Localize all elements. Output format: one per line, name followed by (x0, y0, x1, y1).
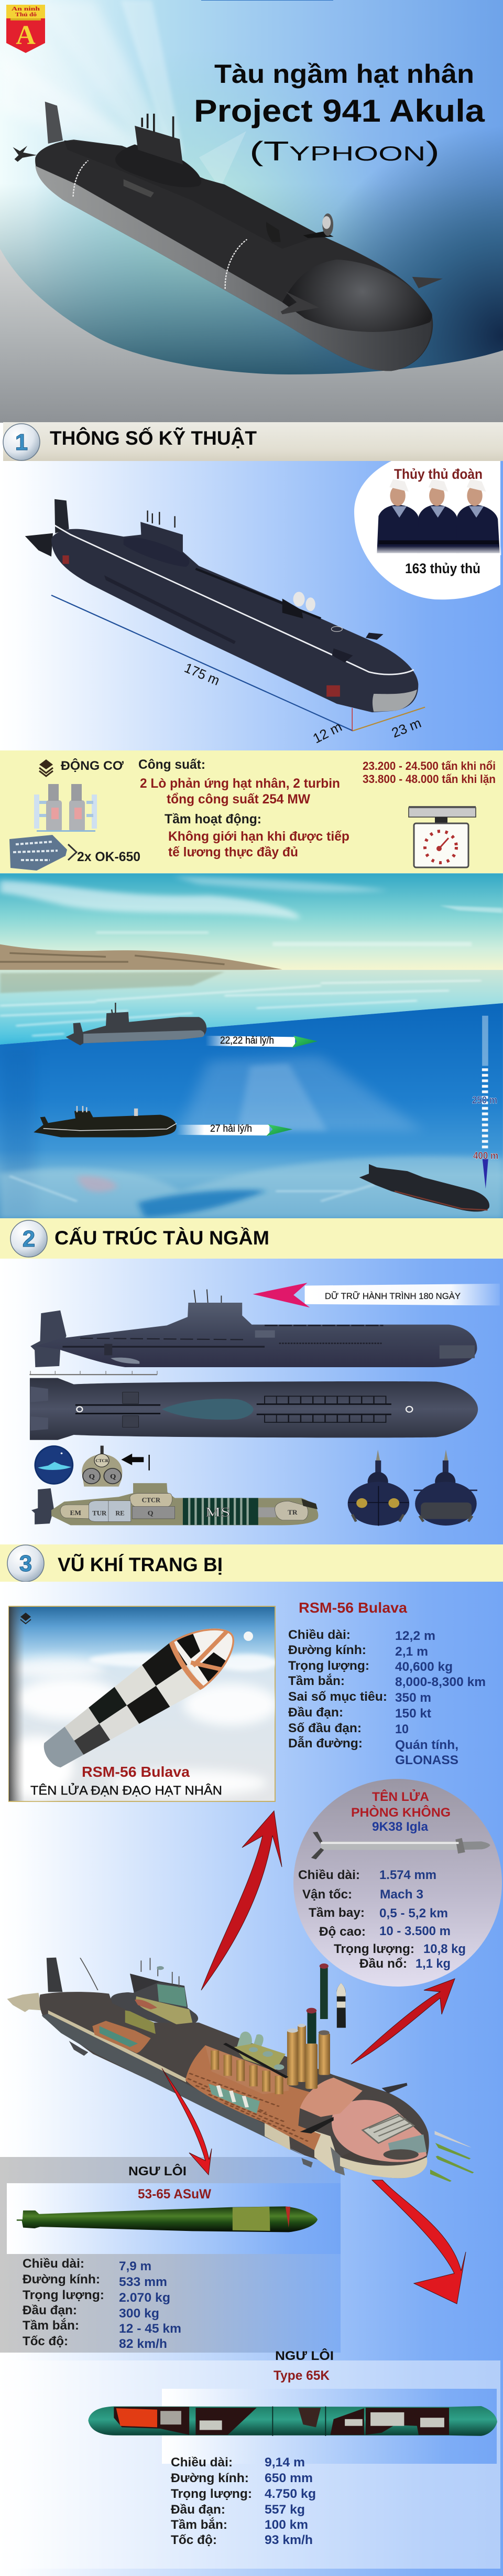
panel: torpedo 53-65: Trọng lượng: (23, 2288, 104, 2302)
panel: engine and weight: 33.800 - 48.000 tấn khi lặn (363, 772, 496, 786)
panel: engine and weight: tổng công suất 254 MW (167, 792, 310, 807)
panel: 9K38 Igla: TÊN LỬA (372, 1789, 429, 1804)
icon: sailors (375, 479, 501, 555)
panel: crew: Thủy thủ đoàn (394, 466, 483, 482)
arrow: to torpedo Type 65K (372, 2180, 466, 2304)
missile: Igla (311, 1832, 490, 1859)
panel: 9K38 Igla: 1.574 mm (379, 1868, 436, 1882)
panel: Bulava specs: 12,2 m (395, 1629, 435, 1643)
panel: Bulava image: RSM-56 Bulava (82, 1764, 190, 1780)
panel: torpedo 53-65: 12 - 45 km (119, 2322, 181, 2336)
submarine: dived (34, 1106, 177, 1137)
panel: 9K38 Igla: 0,5 - 5,2 km (379, 1906, 448, 1920)
arrow: 27 knots (177, 1123, 292, 1136)
panel: torpedo 53-65: 533 mm (119, 2275, 167, 2289)
panel: Bulava specs (288, 1600, 486, 1767)
torpedo image: Type 65K (88, 2406, 497, 2436)
panel: Bulava image: TÊN LỬA ĐẠN ĐẠO HẠT NHÂN (30, 1783, 222, 1798)
panel: Bulava image (0, 1606, 278, 1801)
panel: Bulava specs: 40,600 kg (395, 1660, 453, 1674)
torpedo image: 53-65 (17, 2206, 318, 2232)
panel: torpedo 53-65: Chiều dài: (23, 2257, 84, 2271)
panel: engine and weight: tế lương thực đầy đủ (168, 845, 298, 860)
icon: logo: An ninh (12, 6, 40, 12)
panel: torpedo Type 65K: Chiều dài: (171, 2455, 233, 2470)
panel: Bulava specs: Số đầu đạn: (288, 1721, 362, 1735)
panel: engine and weight: 23.200 - 24.500 tấn khi nổi (363, 759, 496, 772)
panel: engine and weight: 2x OK-650 (77, 850, 140, 864)
panel: 9K38 Igla: Chiều dài: (298, 1868, 360, 1882)
submarine: plan view (30, 1378, 478, 1440)
icon: hull cross-section (82, 1446, 122, 1487)
panel: hero (0, 0, 503, 423)
submarine: compartments: CTCR (142, 1497, 161, 1504)
panel: Bulava specs: 8,000-8,300 km (395, 1675, 486, 1689)
arrow: 22,22 knots (205, 1035, 318, 1048)
panel: torpedo Type 65K: 557 kg (265, 2503, 305, 2517)
panel: engine and weight: 2 Lò phản ứng hạt nhân, 2 turbin (140, 776, 340, 791)
panel: torpedo 53-65: Tốc độ: (23, 2334, 68, 2348)
arrow: endurance (253, 1283, 500, 1307)
section 1 background (0, 423, 503, 751)
panel: 9K38 Igla: 1,1 kg (415, 1957, 451, 1971)
arrow: 22,22 knots: 22,22 hải lý/h (220, 1035, 274, 1046)
tubes (287, 2031, 298, 2086)
panel: Bulava specs: RSM-56 Bulava (299, 1600, 407, 1616)
heading: section 1: 1 (15, 430, 28, 455)
icon: turbines (9, 835, 76, 871)
submarine: compartments: MS (205, 1505, 231, 1519)
submarine: surface (66, 1003, 206, 1045)
panel: torpedo 53-65: 2.070 kg (119, 2291, 170, 2305)
panel: torpedo Type 65K: 4.750 kg (265, 2487, 316, 2501)
panel: sea depth scene (0, 873, 503, 1218)
heading: section 3: 3 (19, 1551, 32, 1576)
panel: 9K38 Igla: Vận tốc: (302, 1887, 352, 1902)
panel: 9K38 Igla: 10,8 kg (423, 1942, 466, 1956)
forward bulkhead (300, 2078, 363, 2117)
panel: torpedo Type 65K: Đường kính: (171, 2471, 249, 2485)
icon: hull cross-section: Q (110, 1473, 116, 1480)
dimension lines (51, 595, 425, 731)
panel: Bulava specs: 150 kt (395, 1706, 431, 1721)
icon: hull cross-section: CTCR (95, 1459, 108, 1464)
icon: logo: A (16, 20, 36, 50)
panel: torpedo Type 65K: Đầu đạn: (171, 2503, 225, 2517)
copper compartments (185, 2045, 321, 2150)
hero submarine (13, 102, 443, 371)
panel: torpedo 53-65: 300 kg (119, 2306, 159, 2321)
panel: 9K38 Igla: Mach 3 (380, 1887, 423, 1902)
heading: section 3: VŨ KHÍ TRANG BỊ (58, 1553, 223, 1575)
submarine: deep (359, 1164, 489, 1211)
panel: torpedo 53-65: 82 km/h (119, 2337, 167, 2351)
title: Tàu ngầm hạt nhân (214, 59, 474, 89)
heading: section 3 (0, 1544, 503, 1582)
underwater (0, 1003, 503, 1218)
title: (T YPHOON ) (249, 136, 440, 167)
depth scale (472, 1016, 498, 1189)
panel: Bulava specs: Chiều dài: (288, 1628, 351, 1642)
arrow: to Bulava (201, 1811, 282, 1990)
panel: torpedo 53-65 (7, 2164, 341, 2351)
arrow: to Igla (351, 1979, 455, 2064)
arrow: section marker (121, 1454, 150, 1471)
submarine: compartments: RE (115, 1510, 125, 1517)
label: 175 m: 175 m (182, 660, 222, 689)
panel: 9K38 Igla: Tầm bay: (309, 1906, 365, 1920)
panel: engine and weight: Không giới hạn khi được tiếp (168, 829, 349, 844)
icon: badge (35, 1445, 73, 1485)
panel: Bulava specs: 10 (395, 1722, 409, 1736)
arrow: endurance: DỮ TRỮ HÀNH TRÌNH 180 NGÀY (325, 1291, 461, 1301)
panel: Bulava specs: GLONASS (395, 1753, 458, 1767)
panel: Bulava specs: 2,1 m (395, 1645, 428, 1659)
panel: crew (354, 461, 501, 599)
swoosh (0, 249, 503, 423)
panel: torpedo 53-65: 7,9 m (119, 2259, 151, 2273)
panel: engine and weight: Tầm hoạt động: (165, 812, 261, 827)
forward hull (314, 2131, 340, 2171)
panel: 9K38 Igla: 9K38 Igla (372, 1820, 429, 1834)
submarine: side perspective (25, 499, 418, 712)
panel: engine and weight: ĐỘNG CƠ (61, 758, 124, 773)
label: 23 m: 23 m (389, 715, 423, 741)
panel: torpedo 53-65: NGƯ LÔI (128, 2164, 187, 2178)
panel: torpedo 53-65: Tầm bắn: (23, 2318, 79, 2333)
heading: section 1: THÔNG SỐ KỸ THUẬT (50, 427, 257, 449)
panel: Bulava specs: Sai số mục tiêu: (288, 1690, 387, 1704)
panel: Bulava specs: Đầu đạn: (288, 1705, 343, 1720)
panel: Bulava specs: Dẫn đường: (288, 1736, 363, 1751)
panel: Bulava specs: Quán tính, (395, 1738, 458, 1752)
heading: section 2: 2 (23, 1226, 35, 1252)
panel: Bulava specs: Tầm bắn: (288, 1673, 345, 1688)
title (194, 59, 485, 167)
heading: section 2 (0, 1218, 503, 1259)
arrow: 27 knots: 27 hải lý/h (210, 1123, 252, 1134)
submarine: compartments: EM (70, 1510, 81, 1517)
arrow: to torpedo 53-65 (162, 2068, 212, 2175)
submarine: side elevation (29, 1290, 477, 1375)
small weapons (435, 2131, 472, 2148)
panel: torpedo Type 65K: 93 km/h (265, 2533, 313, 2547)
icon: hull cross-section: Q (89, 1473, 95, 1480)
missile (44, 1628, 235, 1767)
panel: torpedo Type 65K: Tốc độ: (171, 2533, 217, 2547)
heading: section 1 (3, 422, 503, 461)
submarine: compartments: TUR (92, 1510, 107, 1517)
panel: torpedo 53-65: Đầu đạn: (23, 2303, 77, 2317)
panel: torpedo Type 65K: Type 65K (274, 2368, 330, 2383)
icon: layers (20, 1613, 31, 1624)
title: Project 941 Akula (194, 93, 485, 128)
panel: torpedo Type 65K: Trọng lượng: (171, 2487, 252, 2501)
panel: 9K38 Igla: Đầu nổ: (359, 1957, 407, 1971)
panel: 9K38 Igla: PHÒNG KHÔNG (351, 1805, 451, 1820)
submarine: compartments: Q (148, 1510, 154, 1517)
panel: Bulava specs: 350 m (395, 1691, 431, 1705)
icon: logo (6, 5, 45, 53)
panel: engine and weight (0, 750, 503, 873)
panel: torpedo 53-65: 53-65 ASuW (138, 2187, 211, 2202)
panel: torpedo Type 65K: 650 mm (265, 2471, 313, 2485)
panel: 9K38 Igla: Trọng lượng: (334, 1942, 414, 1956)
panel: torpedo Type 65K: NGƯ LÔI (275, 2348, 334, 2363)
panel: torpedo Type 65K: Tầm bắn: (171, 2517, 227, 2532)
panel: weapons background (0, 1582, 503, 2576)
icon: reactors (34, 784, 97, 832)
sky (0, 873, 503, 975)
panel: crew: 163 thủy thủ (405, 561, 480, 576)
submarine: cutaway (7, 1958, 473, 2181)
panel: torpedo 53-65 background (0, 2157, 341, 2353)
heading: section 2: CẤU TRÚC TÀU NGẦM (54, 1227, 269, 1249)
panel: Bulava specs: Trọng lượng: (288, 1659, 369, 1673)
panel: torpedo 53-65: Đường kính: (23, 2272, 100, 2287)
panel: submarine structure (0, 1259, 503, 1544)
icon: logo: Thủ đô (15, 12, 37, 18)
panel: Bulava specs: Đường kính: (288, 1643, 366, 1657)
icon: layers (39, 759, 53, 776)
panel: 9K38 Igla: Độ cao: (319, 1925, 366, 1939)
water surface (0, 970, 503, 1045)
depth scale: 400 m (473, 1151, 498, 1162)
panel: torpedo Type 65K: 9,14 m (265, 2455, 305, 2470)
depth scale: 250 m (472, 1095, 497, 1106)
submarine: compartments (31, 1483, 318, 1525)
label: 12 m: 12 m (310, 718, 344, 746)
submarine: front views (348, 1450, 477, 1526)
panel: 9K38 Igla (293, 1779, 502, 1987)
panel: engine and weight: Công suất: (138, 757, 205, 772)
panel: torpedo Type 65K: 100 km (265, 2518, 308, 2532)
submarine: compartments: TR (288, 1509, 298, 1517)
panel: 9K38 Igla: 10 - 3.500 m (379, 1924, 451, 1938)
icon: scale (409, 806, 476, 867)
panel: torpedo Type 65K (0, 2348, 500, 2569)
